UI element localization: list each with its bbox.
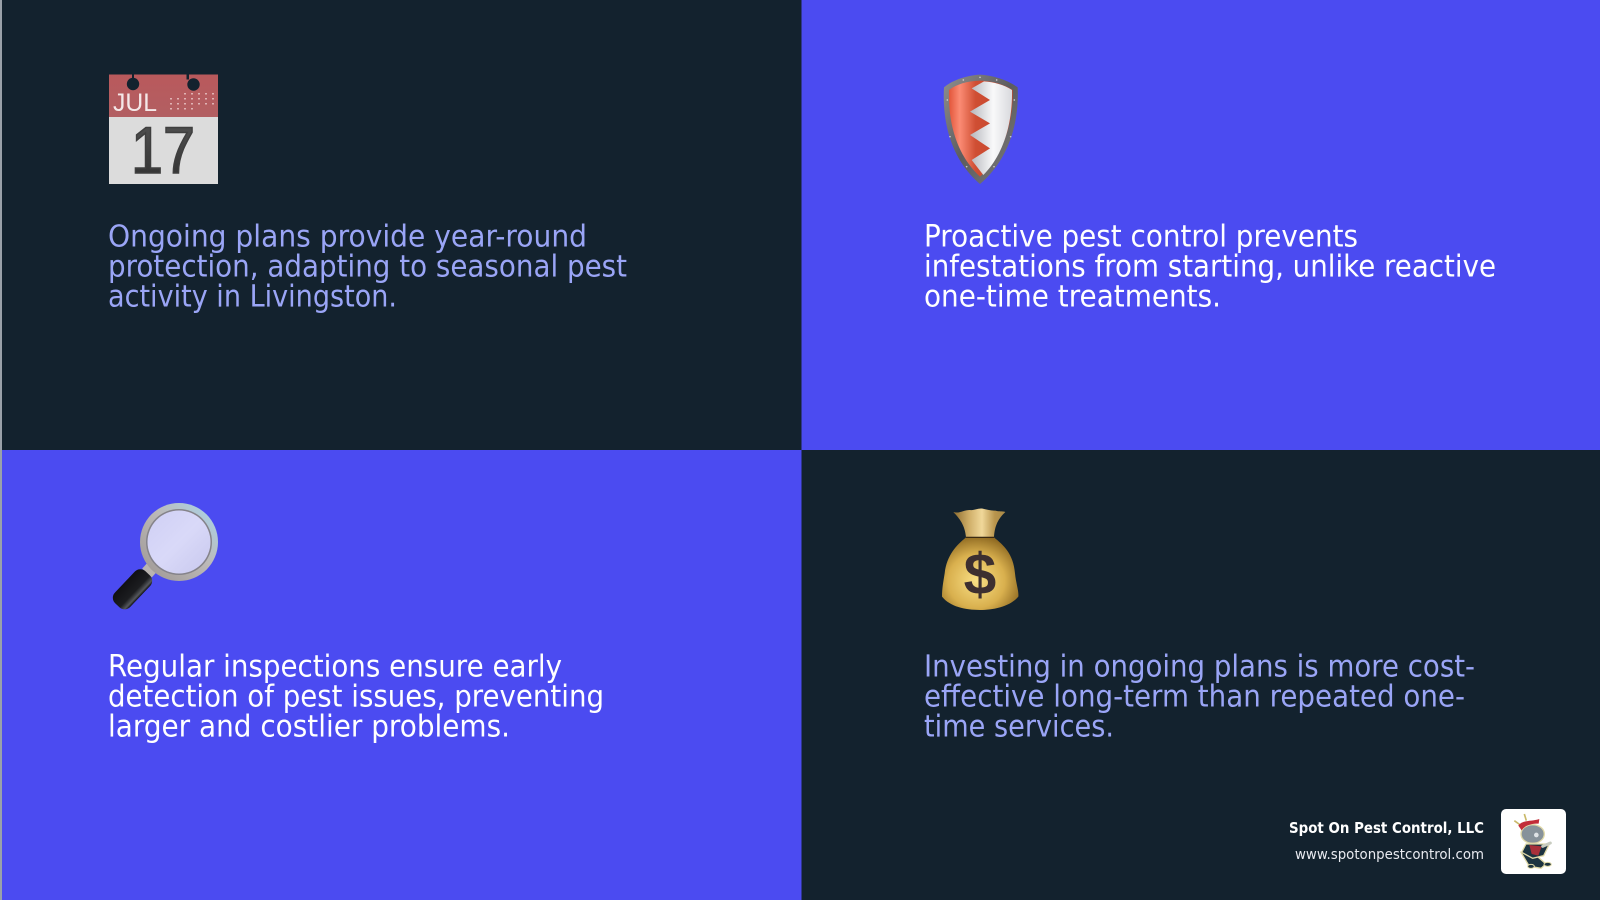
- icon: shield: [944, 75, 1018, 184]
- text: regular inspections: larger and costlier problems.: [108, 710, 510, 744]
- logo: mascot: [1501, 809, 1566, 874]
- text: proactive control: infestations from starting, unlike reactive: [924, 250, 1496, 284]
- text: cost effective: Investing in ongoing plans is more cost-: [924, 650, 1475, 684]
- text: proactive control: [924, 220, 1496, 314]
- panel: proactive control: [802, 0, 1600, 450]
- icon: money bag: $: [964, 542, 996, 607]
- footer: brand: [1289, 809, 1566, 874]
- page edge strip: [0, 0, 2, 900]
- text: cost effective: time services.: [924, 710, 1114, 744]
- icon: calendar: JUL: [113, 89, 157, 117]
- text: regular inspections: [108, 650, 604, 744]
- text: cost effective: effective long-term than repeated one-: [924, 680, 1465, 714]
- brand website: www.spotonpestcontrol.com: [1295, 847, 1484, 863]
- text: cost effective: [924, 650, 1475, 744]
- text: regular inspections: detection of pest issues, preventing: [108, 680, 604, 714]
- icon: calendar: [109, 74, 218, 187]
- text: proactive control: Proactive pest control prevents: [924, 220, 1358, 254]
- text: ongoing plans: [108, 220, 627, 314]
- panel: regular inspections: [2, 450, 802, 900]
- icon: magnifying glass: [110, 503, 218, 612]
- text: ongoing plans: activity in Livingston.: [108, 280, 397, 314]
- panel: cost effective: [802, 450, 1600, 900]
- brand name: Spot On Pest Control, LLC: [1289, 819, 1484, 837]
- icon: calendar: 17: [131, 113, 195, 187]
- text: regular inspections: Regular inspections ensure early: [108, 650, 562, 684]
- icon: money bag: [942, 509, 1018, 610]
- text: ongoing plans: Ongoing plans provide year-round: [108, 220, 587, 254]
- text: ongoing plans: protection, adapting to seasonal pest: [108, 250, 627, 284]
- panel: ongoing plans: [2, 0, 802, 450]
- text: proactive control: one-time treatments.: [924, 280, 1221, 314]
